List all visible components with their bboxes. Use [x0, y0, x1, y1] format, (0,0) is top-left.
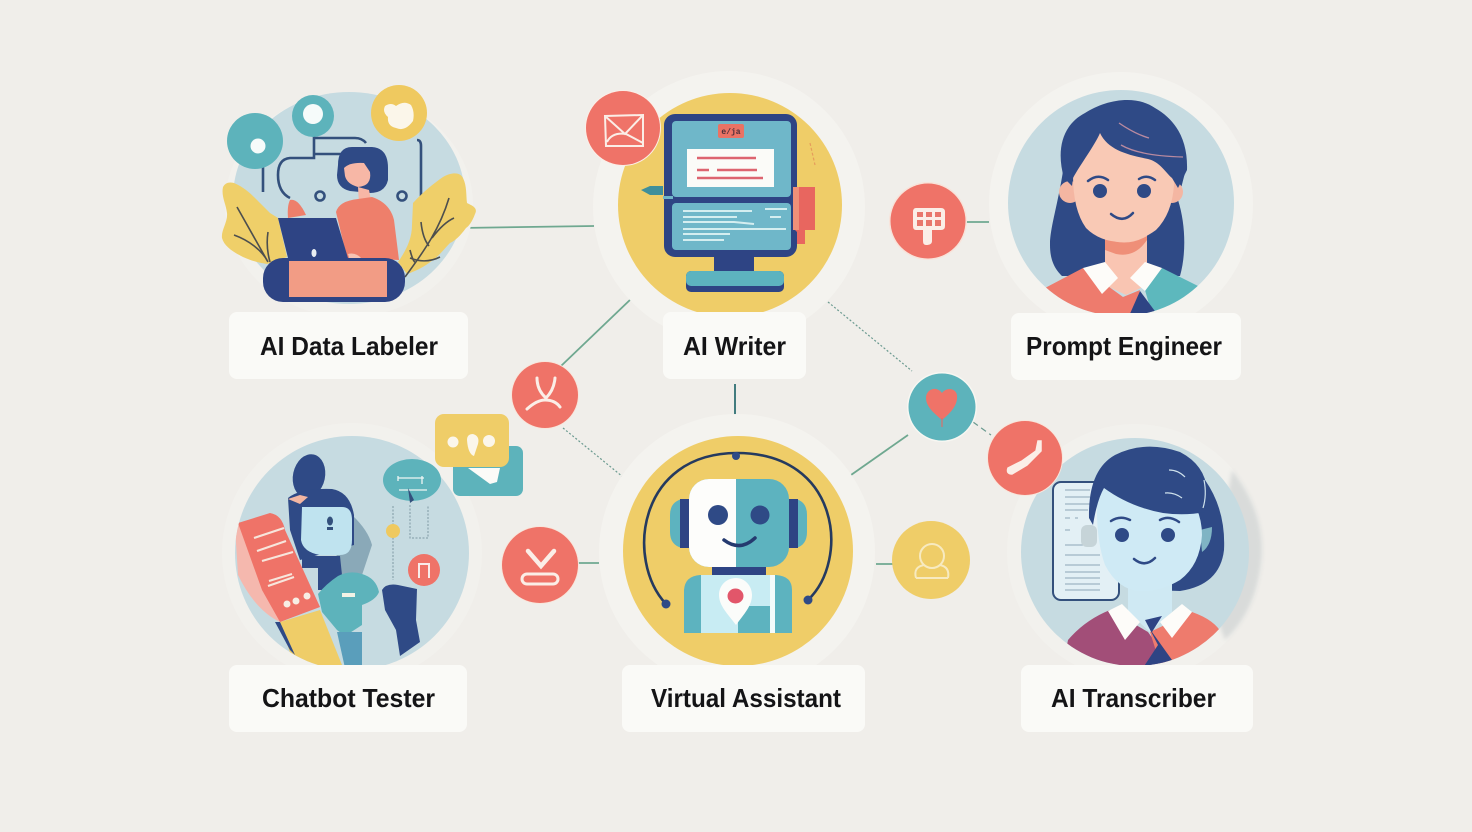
- eyes and smile: [1088, 177, 1155, 219]
- text lines: [683, 209, 787, 240]
- yellow dot: [386, 524, 400, 538]
- icon: chevron and bar: [501, 526, 579, 604]
- label: Chatbot Tester: [229, 665, 467, 732]
- icon: teal node large: [227, 113, 283, 169]
- left plant: [222, 182, 287, 264]
- robot body: [684, 575, 792, 633]
- laptop: [278, 218, 362, 261]
- portrait: [1053, 447, 1224, 680]
- panel: AI Data Labeler: [222, 85, 476, 317]
- neck: [1105, 235, 1147, 295]
- shirt right: [1145, 268, 1198, 312]
- icon: keyboard: [889, 182, 967, 260]
- pen: [641, 186, 673, 199]
- robot head: [689, 479, 789, 567]
- icon: chat bubbles: [435, 414, 523, 496]
- figure: [235, 451, 420, 668]
- label: Prompt Engineer: [1011, 313, 1241, 380]
- neck: [1128, 584, 1172, 632]
- portrait: [1046, 100, 1198, 313]
- bookmark tab: [793, 187, 815, 244]
- thought bubble: [383, 459, 441, 580]
- icon: chevron person: [511, 361, 579, 429]
- icon: teal node small: [292, 95, 334, 137]
- side ear left: [1081, 525, 1097, 547]
- icon: wrench tool: [987, 420, 1063, 496]
- infographic canvas: [222, 85, 1262, 732]
- red title tag: [718, 124, 744, 138]
- network lines: [263, 135, 421, 200]
- red title tag: e/ja: [721, 128, 741, 137]
- panel: Virtual Assistant: [622, 414, 853, 665]
- monitor: [664, 114, 797, 292]
- document: [1053, 482, 1119, 600]
- shirt center: [1130, 291, 1155, 313]
- small red badge: [408, 554, 440, 586]
- label: AI Writer: AI Writer: [683, 331, 786, 361]
- label: AI Writer: [663, 312, 806, 379]
- robot neck: [712, 567, 766, 575]
- collar: [1083, 262, 1162, 294]
- desk: [263, 258, 405, 302]
- panel: Prompt Engineer: [1008, 90, 1234, 313]
- icon: heart: [907, 372, 977, 442]
- label: Virtual Assistant: [622, 665, 865, 732]
- panel: AI Transcriber: [1021, 438, 1262, 665]
- label: AI Data Labeler: AI Data Labeler: [260, 331, 438, 361]
- face: [1059, 125, 1183, 242]
- icon: yellow person: [892, 521, 970, 599]
- document card: [687, 149, 774, 187]
- ear: [1200, 527, 1212, 552]
- face: [1097, 488, 1202, 588]
- icon: yellow data node: [371, 85, 427, 141]
- panel: Chatbot Tester: [235, 436, 469, 665]
- hair front: [1061, 100, 1187, 188]
- label: AI Data Labeler: [229, 312, 468, 379]
- label: AI Transcriber: AI Transcriber: [1051, 683, 1216, 713]
- back hair: [1172, 480, 1224, 591]
- hair front: [1089, 447, 1207, 525]
- icon: envelope: [585, 90, 661, 166]
- connector lines: [460, 222, 991, 564]
- robot ears: [670, 499, 807, 548]
- person: [288, 147, 399, 260]
- label: Chatbot Tester: Chatbot Tester: [262, 683, 435, 713]
- eyes and smile: [1111, 518, 1179, 563]
- panel: AI Writer: [593, 71, 865, 343]
- right plant: [398, 173, 476, 277]
- shirt left: [1046, 268, 1140, 313]
- label: Virtual Assistant: Virtual Assistant: [651, 683, 841, 713]
- shirt: [1067, 610, 1166, 665]
- label: AI Transcriber: [1021, 665, 1253, 732]
- robot arc: [644, 452, 831, 608]
- back hair: [1050, 172, 1185, 276]
- label: Prompt Engineer: Prompt Engineer: [1026, 331, 1222, 361]
